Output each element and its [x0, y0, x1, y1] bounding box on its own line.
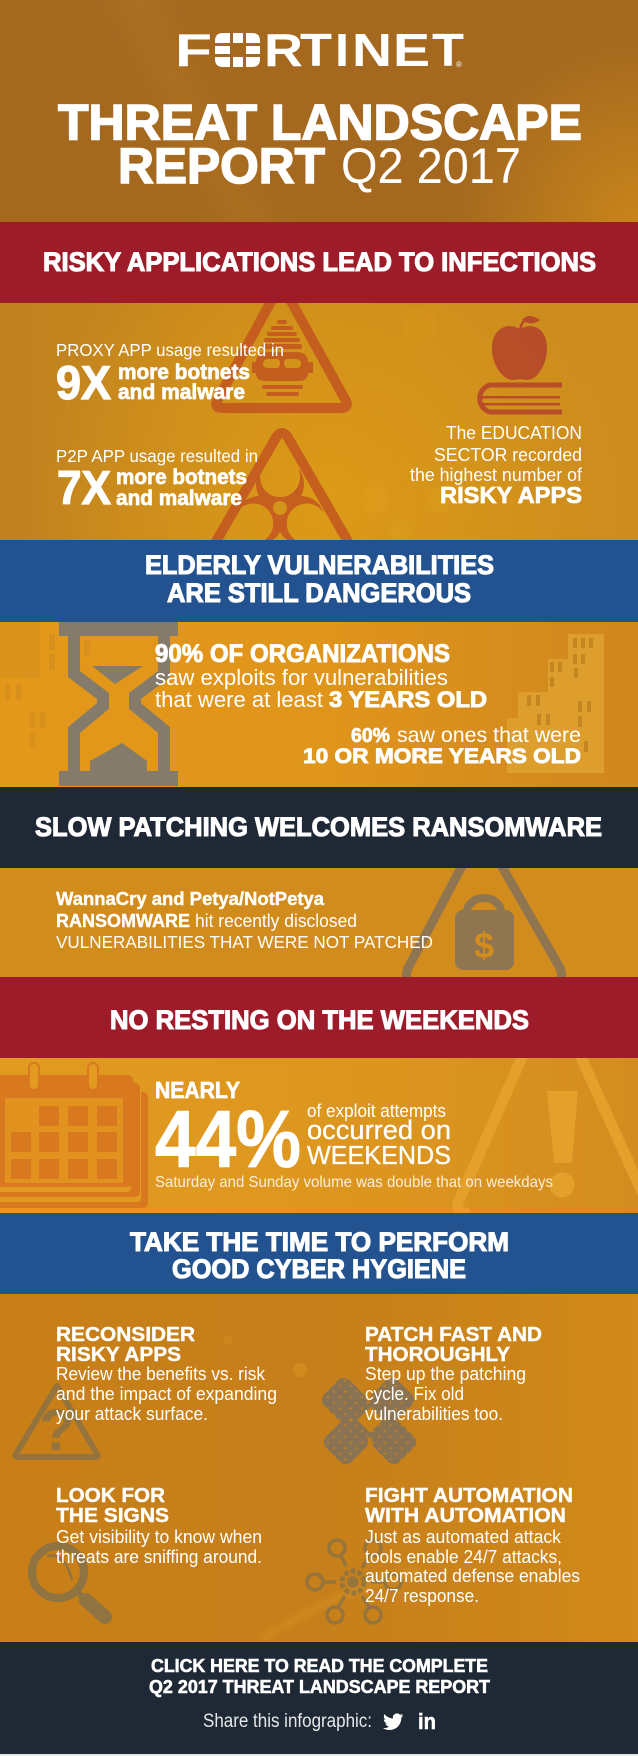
share line: Share this infographic: — [203, 1711, 372, 1732]
text block: education sector: SECTOR recorded — [434, 444, 582, 465]
text block: wannacry: hit recently disclosed — [195, 911, 357, 931]
icon: linkedin: in — [418, 1709, 436, 1734]
text block: fight automation: automated defense enables — [365, 1566, 580, 1586]
call to action: Q2 2017 THREAT LANDSCAPE REPORT — [149, 1677, 490, 1697]
text block: reconsider risky apps: RISKY APPS — [56, 1343, 181, 1366]
title: THREAT LANDSCAPE — [58, 94, 582, 150]
text block: p2p app: and malware — [116, 487, 242, 510]
text block: proxy app: 9X — [56, 356, 111, 409]
logo: Fortinet: N — [352, 24, 392, 76]
icon: exclamation warning triangle — [458, 991, 638, 1320]
call to action: CLICK HERE TO READ THE COMPLETE — [151, 1656, 488, 1676]
text block: 60 percent — [303, 724, 581, 768]
band: no resting — [0, 977, 638, 1058]
header background — [0, 0, 638, 222]
stat: 44 percent — [155, 1077, 553, 1191]
title: Q2 2017 — [341, 138, 521, 194]
text block: 60 percent: saw ones that were — [397, 724, 581, 747]
text block: reconsider risky apps: and the impact of expanding — [56, 1384, 277, 1404]
text block: proxy app: and malware — [118, 381, 245, 404]
text block: patch fast: cycle. Fix old — [365, 1384, 464, 1404]
text block: look for the signs: THE SIGNS — [56, 1504, 169, 1527]
panel: section 3 background — [0, 868, 638, 977]
logo: Fortinet: O — [215, 24, 260, 76]
text block: education sector: RISKY APPS — [440, 482, 582, 508]
band: elderly vulnerabilities — [0, 540, 638, 622]
icon: city right — [507, 634, 604, 773]
icon: padlock warning triangle: $ — [474, 925, 494, 966]
title — [58, 94, 582, 194]
text block: patch fast: THOROUGHLY — [365, 1343, 510, 1366]
text block: fight automation: WITH AUTOMATION — [365, 1504, 566, 1527]
text block: proxy app: more botnets — [118, 361, 250, 384]
text block: 90 percent of organizations — [155, 640, 487, 712]
icon: biohazard warning triangle — [214, 433, 350, 549]
band: slow patching — [0, 787, 638, 868]
text block: reconsider risky apps — [56, 1323, 277, 1424]
icon: automation gear network — [307, 1540, 401, 1623]
text block: patch fast: Step up the patching — [365, 1364, 526, 1384]
text block: p2p app: 7X — [57, 461, 111, 514]
heading: cyber hygiene: TAKE THE TIME TO PERFORM — [130, 1227, 509, 1257]
text block: proxy app — [56, 340, 284, 409]
stat: 44 percent: occurred on — [307, 1115, 451, 1145]
stat: 44 percent: Saturday and Sunday volume was double that on weekdays — [155, 1174, 553, 1191]
text block: reconsider risky apps: Review the benefits vs. risk — [56, 1364, 266, 1384]
text block: look for the signs: Get visibility to know when — [56, 1527, 262, 1547]
call to action — [149, 1656, 490, 1697]
panel: section 5 background — [0, 1294, 638, 1642]
panel: section 4 background — [0, 1058, 638, 1213]
text block: 60 percent: 60% — [351, 725, 390, 747]
text block: patch fast: PATCH FAST AND — [365, 1323, 542, 1346]
logo: Fortinet: E — [393, 24, 430, 76]
logo: Fortinet: I — [335, 24, 349, 76]
text block: wannacry — [56, 889, 433, 952]
band: risky applications — [0, 222, 638, 303]
text block: patch fast: vulnerabilities too. — [365, 1404, 503, 1424]
text block: fight automation: Just as automated attack — [365, 1527, 562, 1547]
icon: robot warning triangle — [216, 283, 347, 408]
heading: cyber hygiene: GOOD CYBER HYGIENE — [172, 1254, 466, 1284]
text block: look for the signs: threats are sniffing around. — [56, 1547, 262, 1567]
stat: 44 percent: NEARLY — [155, 1077, 240, 1103]
icon: padlock warning triangle — [406, 830, 562, 985]
text block: 60 percent: 10 OR MORE YEARS OLD — [303, 744, 581, 768]
stat: 44 percent: of exploit attempts — [307, 1101, 446, 1121]
text block: p2p app: more botnets — [116, 466, 247, 489]
icon: apple on books — [480, 316, 562, 412]
icon: hourglass — [59, 622, 178, 786]
icon: question triangle — [15, 1386, 98, 1463]
stat: 44 percent: 44% — [155, 1095, 301, 1185]
title: REPORT — [118, 138, 325, 194]
text block: 90 percent of organizations: 90% OF ORGANIZATIONS — [155, 640, 450, 668]
stat: 44 percent: WEEKENDS — [307, 1140, 451, 1170]
text block: 90 percent of organizations: that were at least — [155, 687, 323, 712]
band: footer — [0, 1642, 638, 1754]
logo: Fortinet: F — [175, 24, 212, 76]
text block: education sector — [410, 422, 583, 508]
icon: question triangle: ? — [39, 1398, 75, 1463]
text block: fight automation: FIGHT AUTOMATION — [365, 1484, 573, 1507]
text block: p2p app: P2P APP usage resulted in — [56, 446, 258, 466]
heading: elderly vulnerabilities — [145, 550, 494, 608]
band: cyber hygiene — [0, 1213, 638, 1294]
text block: patch fast — [365, 1323, 542, 1424]
text block: wannacry: WannaCry and Petya/NotPetya — [56, 889, 325, 909]
text block: p2p app — [56, 446, 258, 514]
text block: fight automation: 24/7 response. — [365, 1586, 479, 1606]
text block: 90 percent of organizations: saw exploits for vulnerabilities — [155, 665, 448, 690]
heading: elderly vulnerabilities: ELDERLY VULNERABILITIES — [145, 550, 494, 580]
logo: Fortinet: ® — [456, 60, 462, 69]
panel: section 1 background — [0, 303, 638, 541]
text block: education sector: The EDUCATION — [446, 422, 582, 443]
icon: bandages — [319, 1375, 419, 1467]
icon: city left — [0, 622, 90, 747]
text block: 90 percent of organizations: 3 YEARS OLD — [329, 687, 487, 712]
panel: section 2 background — [0, 622, 638, 787]
logo: Fortinet: T — [300, 24, 332, 76]
icon: twitter — [383, 1713, 403, 1730]
text block: look for the signs: LOOK FOR — [56, 1484, 165, 1507]
text block: fight automation: tools enable 24/7 attacks, — [365, 1547, 562, 1567]
text block: reconsider risky apps: your attack surface. — [56, 1404, 208, 1424]
text block: proxy app: PROXY APP usage resulted in — [56, 340, 284, 360]
logo: Fortinet — [175, 24, 464, 76]
icon: calendar — [0, 1063, 148, 1208]
heading: cyber hygiene — [130, 1227, 509, 1284]
text block: wannacry: VULNERABILITIES THAT WERE NOT PATCHED — [56, 932, 433, 952]
text block: education sector: the highest number of — [410, 464, 583, 485]
heading: no resting: NO RESTING ON THE WEEKENDS — [110, 1005, 529, 1035]
heading: risky applications: RISKY APPLICATIONS LEAD TO INFECTIONS — [43, 247, 596, 277]
text block: reconsider risky apps: RECONSIDER — [56, 1323, 195, 1346]
logo: Fortinet: R — [264, 24, 303, 76]
text block: look for the signs — [56, 1484, 262, 1567]
heading: slow patching: SLOW PATCHING WELCOMES RANSOMWARE — [35, 812, 602, 842]
logo: Fortinet: T — [432, 24, 464, 76]
text block: fight automation — [365, 1484, 580, 1606]
icon: magnifier — [32, 1546, 105, 1617]
text block: wannacry: RANSOMWARE — [56, 911, 190, 931]
heading: elderly vulnerabilities: ARE STILL DANGEROUS — [167, 578, 471, 608]
